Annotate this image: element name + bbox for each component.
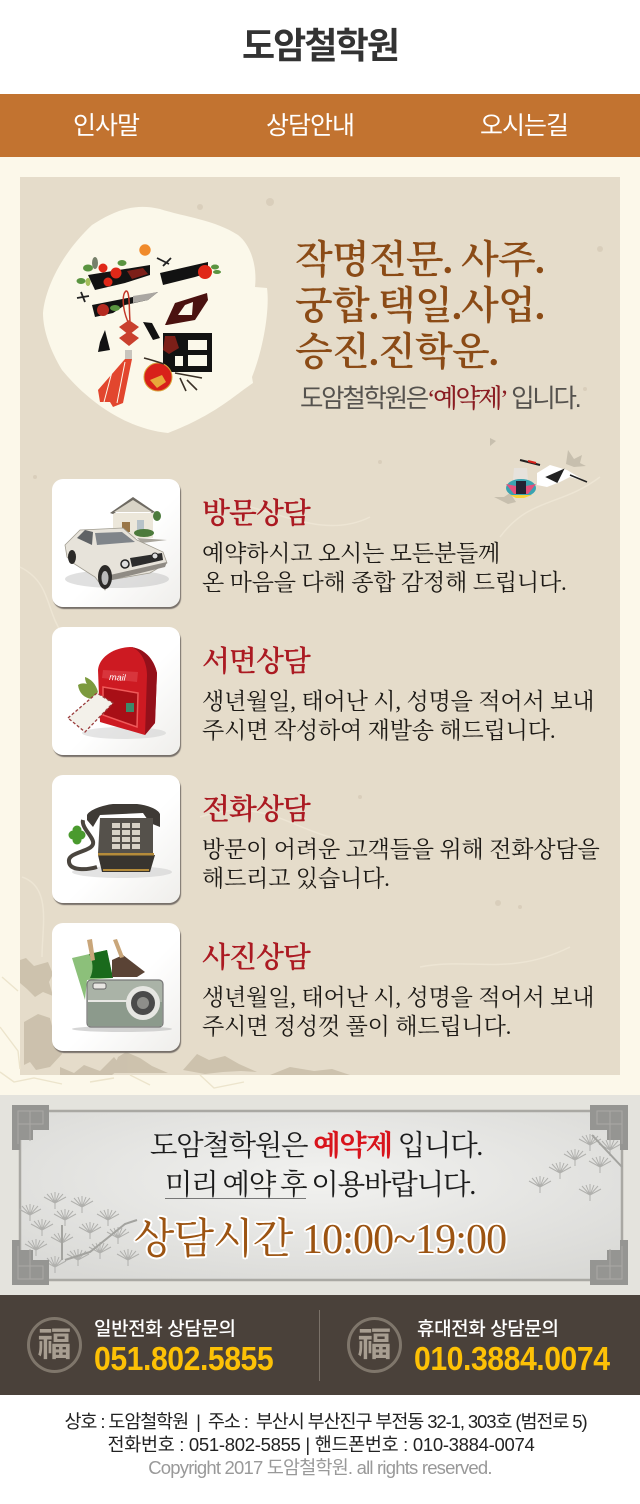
badge: 福 left xyxy=(27,1317,82,1373)
service: letter xyxy=(52,627,594,758)
underline xyxy=(165,1198,306,1199)
hero heading: services: 작명전문. 사주. xyxy=(295,239,544,282)
nav: directions: 오시는길 xyxy=(480,112,568,140)
hero sub text: 도암철학원은‘예약제’ 입니다. xyxy=(300,384,579,413)
reservation banner xyxy=(0,1095,640,1295)
badge: 福 left: 福 xyxy=(38,1326,72,1364)
navigation bar xyxy=(0,94,640,157)
text: photo: 주시면 정성껏 풀이 해드립니다. xyxy=(202,1014,511,1039)
hero heading: services xyxy=(295,239,544,374)
footer: copyright: Copyright 2017 도암철학원. all rights reserved. xyxy=(148,1457,492,1478)
text: letter xyxy=(202,689,594,743)
main panel xyxy=(20,177,620,1075)
nav: greeting: 인사말 xyxy=(73,112,139,140)
service: phone xyxy=(52,775,600,906)
icon card: car and house xyxy=(52,479,180,607)
banner frame and pine decor xyxy=(12,1105,628,1285)
hero heading: services: 궁합.택일.사업. xyxy=(295,285,544,328)
icon card: red mailbox xyxy=(52,627,180,755)
text: visit: 온 마음을 다해 종합 감정해 드립니다. xyxy=(202,570,567,595)
site title: 도암철학원 xyxy=(242,25,398,66)
text: photo xyxy=(202,985,594,1039)
icon card: camera xyxy=(52,923,180,1051)
badge: 福 right xyxy=(347,1317,402,1373)
ink mountain and paper texture xyxy=(0,198,603,1089)
label: mobile: 휴대전화 상담문의 xyxy=(417,1319,559,1340)
icon card: telephone xyxy=(52,775,180,903)
hero: brush circle with 福 xyxy=(43,207,268,433)
cream page background xyxy=(0,157,640,1095)
heading: letter: 서면상담 xyxy=(202,646,310,678)
number: landline: 051.802.5855 xyxy=(94,1340,273,1377)
heading: visit: 방문상담 xyxy=(202,498,310,530)
badge: 福 right: 福 xyxy=(358,1326,392,1364)
icon: crane and lucky bag xyxy=(490,438,588,504)
heading: phone: 전화상담 xyxy=(202,794,310,826)
heading: photo: 사진상담 xyxy=(202,942,310,974)
text: visit: 예약하시고 오시는 모든분들께 xyxy=(202,541,500,566)
nav: consultation: 상담안내 xyxy=(266,112,354,140)
text: visit xyxy=(202,541,567,595)
consultation hours: 상담시간 10:00~19:00 xyxy=(134,1217,506,1263)
footer: phone numbers: 전화번호 : 051-802-5855 | 핸드폰번호 : 010-3884-0074 xyxy=(108,1434,534,1455)
footer: address: 상호 : 도암철학원 | 주소 : 부산시 부산진구 부전동 32-1, 303호 (범전로 5) xyxy=(64,1411,587,1432)
phone contact bar xyxy=(0,1295,640,1395)
number: mobile: 010.3884.0074 xyxy=(414,1340,610,1377)
banner line 2: 미리 예약 후 이용바랍니다. xyxy=(165,1170,475,1201)
icon card: red mailbox: mail xyxy=(109,672,127,683)
text: phone: 방문이 어려운 고객들을 위해 전화상담을 xyxy=(202,837,600,862)
text: phone xyxy=(202,837,600,891)
hero heading: services: 승진.진학운. xyxy=(295,331,498,374)
text: photo: 생년월일, 태어난 시, 성명을 적어서 보내 xyxy=(202,985,594,1010)
banner line 1: 도암철학원은 예약제 입니다. xyxy=(150,1131,482,1162)
text: letter: 생년월일, 태어난 시, 성명을 적어서 보내 xyxy=(202,689,594,714)
divider xyxy=(319,1310,320,1381)
text: phone: 해드리고 있습니다. xyxy=(202,866,390,891)
service: visit xyxy=(52,479,567,610)
service: photo xyxy=(52,923,594,1054)
label: landline: 일반전화 상담문의 xyxy=(94,1319,236,1340)
text: letter: 주시면 작성하여 재발송 해드립니다. xyxy=(202,718,555,743)
